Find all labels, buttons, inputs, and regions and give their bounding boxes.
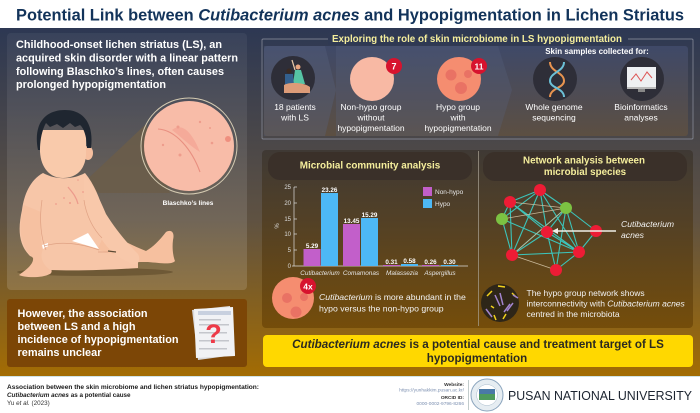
callout text: However, the association [18,308,148,320]
citation [7,384,259,407]
heading: Microbial community analysis [300,160,441,172]
step: hypo group: 11 [474,62,484,72]
citation: Cutibacterium acnes as a potential cause [7,392,131,399]
legend: Non-hypo [435,189,464,196]
bar chart: 5.29 [306,243,319,250]
illustration: baby [17,110,175,277]
rash [68,187,78,204]
front thigh [42,244,138,270]
icon: 4x skin: 4x [303,282,313,292]
bar chart: 15.29 [362,212,378,219]
step: non-hypo group [337,57,405,133]
bar chart: Comamonas [343,270,380,277]
bar chart: 13.45 [344,218,360,225]
finding text: hypo versus the non-hypo group [319,304,444,314]
conclusion banner [263,335,693,367]
network diagram [496,184,674,276]
intro text: acquired skin disorder with a linear pattern [16,52,238,64]
logo: university seal [471,379,503,411]
bar chart: 0 [288,264,292,270]
magnifier cone [78,124,170,193]
bar chart: 0.58 [403,258,416,265]
intro text [16,39,238,91]
torso [20,173,106,262]
step: patients: 18 patients [274,102,316,112]
website and ORCID: https://yunhakkim.pusan.ac.kr/ [399,388,465,394]
step: whole genome sequencing: sequencing [532,112,576,122]
icon: document with question mark [192,306,235,360]
bar chart: 0.31 [385,259,398,266]
callout text: remains unclear [18,347,102,359]
website and ORCID: ORCID ID: [441,395,464,401]
panel: network analysis [481,152,687,322]
step: non-hypo group: 7 [391,62,397,72]
website and ORCID [399,382,465,407]
finding text [526,288,686,319]
step: bioinformatics: Bioinformatics [614,102,668,112]
divider [478,151,480,326]
bar chart: 20 [284,201,292,207]
panel: microbial community analysis [268,152,472,319]
arrow label: acnes [621,230,645,240]
heading [483,152,687,181]
bar chart: 0.26 [424,259,437,266]
step: patients [271,56,316,122]
callout text [18,308,179,359]
step: non-hypo group: Non-hypo group [341,102,402,112]
callout text: between LS and a high [18,321,136,333]
conclusion banner: hypopigmentation [427,352,527,365]
finding text: interconnectivity with Cutibacterium acnes [526,298,686,308]
section: exploring skin microbiome [262,33,693,139]
step: hypo group: hypopigmentation [424,123,492,133]
bar chart: Malassezia [386,270,418,277]
step: hypo group: with [449,112,466,122]
intro text: Childhood-onset lichen striatus (LS), an [16,39,222,51]
legend: Hypo [435,201,451,208]
panel: left illustration [7,33,247,290]
finding text: The hypo group network shows [526,288,645,298]
arrow label: Cutibacterium [621,219,674,229]
finding text: centred in the microbiota [526,309,620,319]
arrow label [621,219,674,240]
bar chart: 25 [284,185,292,191]
bar chart: 23.26 [322,187,338,194]
icon: 4x skin [272,277,316,319]
bar chart: 10 [284,232,292,238]
heading: Network analysis between [523,156,645,166]
finding text: Cutibacterium is more abundant in the [319,292,466,302]
step: bioinformatics: analyses [624,112,658,122]
left arm [19,205,52,277]
heading: Exploring the role of skin microbiome in LS hypopigmentation [332,34,622,45]
head [36,151,38,153]
panel: unclear association [7,299,247,367]
website and ORCID: 0000-0002-9796-8266 [417,401,464,407]
chevron steps [264,46,336,136]
citation: Yu et al. (2023) [7,400,50,407]
right arm [84,176,139,264]
step: hypo group: Hypo group [436,102,480,112]
label: Blaschko's lines: Blaschko’s lines [163,200,214,207]
panel: analyses background [262,150,693,328]
label: skin samples: Skin samples collected for: [545,47,649,56]
step: bioinformatics [614,57,668,122]
icon: document with question mark: ? [205,319,222,349]
step: non-hypo group: hypopigmentation [337,123,405,133]
bar chart [275,185,468,277]
conclusion banner: Cutibacterium acnes is a potential cause and treatment target of LS [292,338,664,351]
arrow [552,228,616,234]
step: hypo group [424,57,492,133]
citation: Association between the skin microbiome and lichen striatus hypopigmentation: [7,384,259,391]
inset: skin close-up [141,98,237,194]
icon: microbes [481,284,519,322]
intro text: prolonged hypopigmentation [16,79,166,91]
diaper [72,233,99,249]
intro text: following Blaschko’s lines, often causes [16,66,224,78]
website and ORCID: Website: [444,382,464,388]
step: whole genome sequencing: Whole genome [525,102,583,112]
bar chart: 15 [284,217,292,223]
back leg [88,216,175,263]
bar chart: Cutibacterium [300,270,340,277]
bar chart: Aspergillus [423,270,456,277]
step: non-hypo group: without [357,112,385,122]
bar chart: 5 [288,248,292,254]
bar chart: % [275,223,281,229]
title: Potential Link between Cutibacterium acnes and Hypopigmentation in Lichen Striatus [16,6,684,24]
step: patients: with LS [280,112,309,122]
heading [268,152,472,180]
heading: microbial species [544,167,627,178]
callout text: incidence of hypopigmentation [18,334,179,346]
finding text [319,292,466,314]
bar chart: 0.30 [443,259,456,266]
logo: university name: PUSAN NATIONAL UNIVERSITY [508,389,693,403]
legend [423,187,464,208]
step: whole genome sequencing [525,57,583,122]
